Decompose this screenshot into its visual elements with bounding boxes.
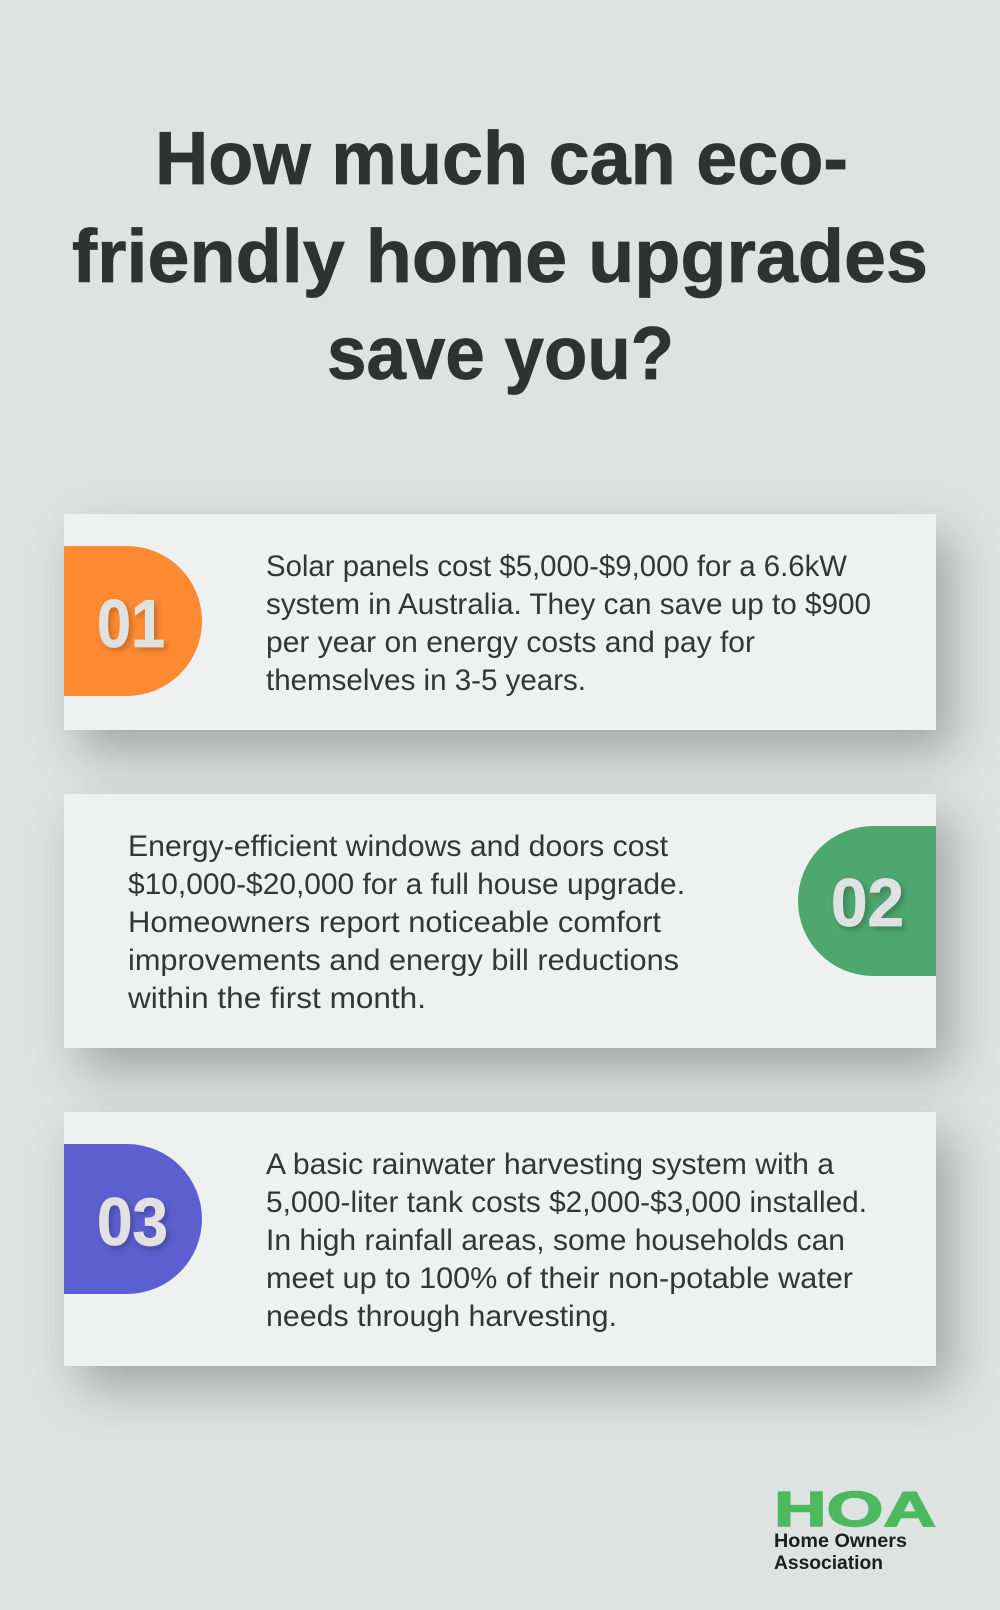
text: solar panels: themselves in 3-5 years. [266, 664, 586, 697]
badge: 02 [798, 826, 936, 976]
text: solar panels: per year on energy costs and pay for [266, 626, 755, 659]
text: solar panels: Solar panels cost $5,000-$9,000 for a 6.6kW [266, 550, 847, 583]
text: windows and doors: $10,000-$20,000 for a full house upgrade. [128, 868, 685, 901]
badge: 01: 01 [97, 586, 165, 662]
badge: 03: 03 [97, 1184, 168, 1260]
panel: rainwater harvesting [64, 1112, 936, 1366]
title: How much can eco- [155, 116, 848, 200]
logo: HOA Home Owners Association [774, 1483, 936, 1574]
badge: 01 [64, 546, 202, 696]
badge: 02: 02 [831, 865, 904, 941]
logo: HOA Home Owners Association: Home Owners [774, 1531, 907, 1552]
text: windows and doors: Homeowners report noticeable comfort [128, 906, 661, 939]
title: friendly home upgrades [72, 214, 928, 298]
panel: windows and doors [64, 794, 936, 1048]
text: solar panels [266, 550, 871, 697]
text: rainwater harvesting: meet up to 100% of their non-potable water [266, 1262, 853, 1295]
text: rainwater harvesting: A basic rainwater harvesting system with a [266, 1148, 835, 1181]
badge: 03 [64, 1144, 202, 1294]
text: windows and doors: improvements and energy bill reductions [128, 944, 679, 977]
logo: HOA Home Owners Association: Association [774, 1553, 883, 1574]
logo: HOA Home Owners Association: HOA [774, 1483, 936, 1537]
text: windows and doors [127, 830, 685, 1015]
title: save you? [327, 311, 674, 395]
text: windows and doors: Energy-efficient windows and doors cost [128, 830, 668, 863]
text: rainwater harvesting: 5,000-liter tank costs $2,000-$3,000 installed. [266, 1186, 867, 1219]
panel: solar panels [64, 514, 936, 730]
text: rainwater harvesting: In high rainfall areas, some households can [266, 1224, 845, 1257]
title [72, 116, 928, 395]
text: rainwater harvesting: needs through harvesting. [266, 1300, 617, 1333]
text: windows and doors: within the first month. [127, 982, 426, 1015]
text: solar panels: system in Australia. They can save up to $900 [266, 588, 871, 621]
text: rainwater harvesting [266, 1148, 867, 1333]
